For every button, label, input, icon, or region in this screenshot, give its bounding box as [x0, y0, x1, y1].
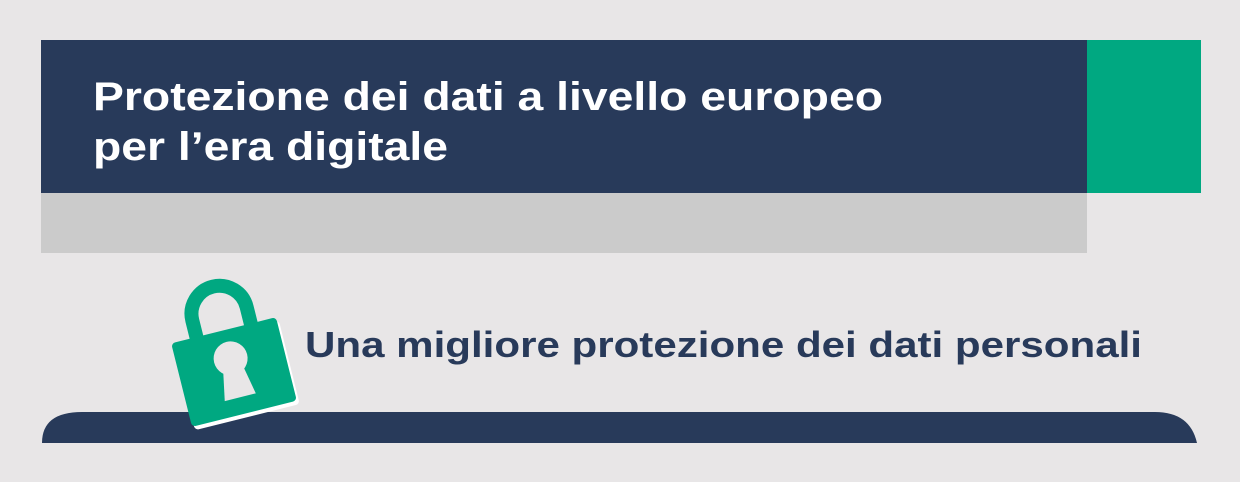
title: Protezione dei dati a livello europeo	[93, 75, 883, 119]
bottom bar	[42, 412, 1197, 443]
title	[93, 75, 883, 169]
subtitle: Una migliore protezione dei dati personali	[305, 324, 1142, 365]
green accent block	[1087, 40, 1201, 193]
icon: padlock	[160, 273, 300, 431]
header panel	[41, 40, 1201, 253]
title: per l’era digitale	[93, 125, 448, 169]
